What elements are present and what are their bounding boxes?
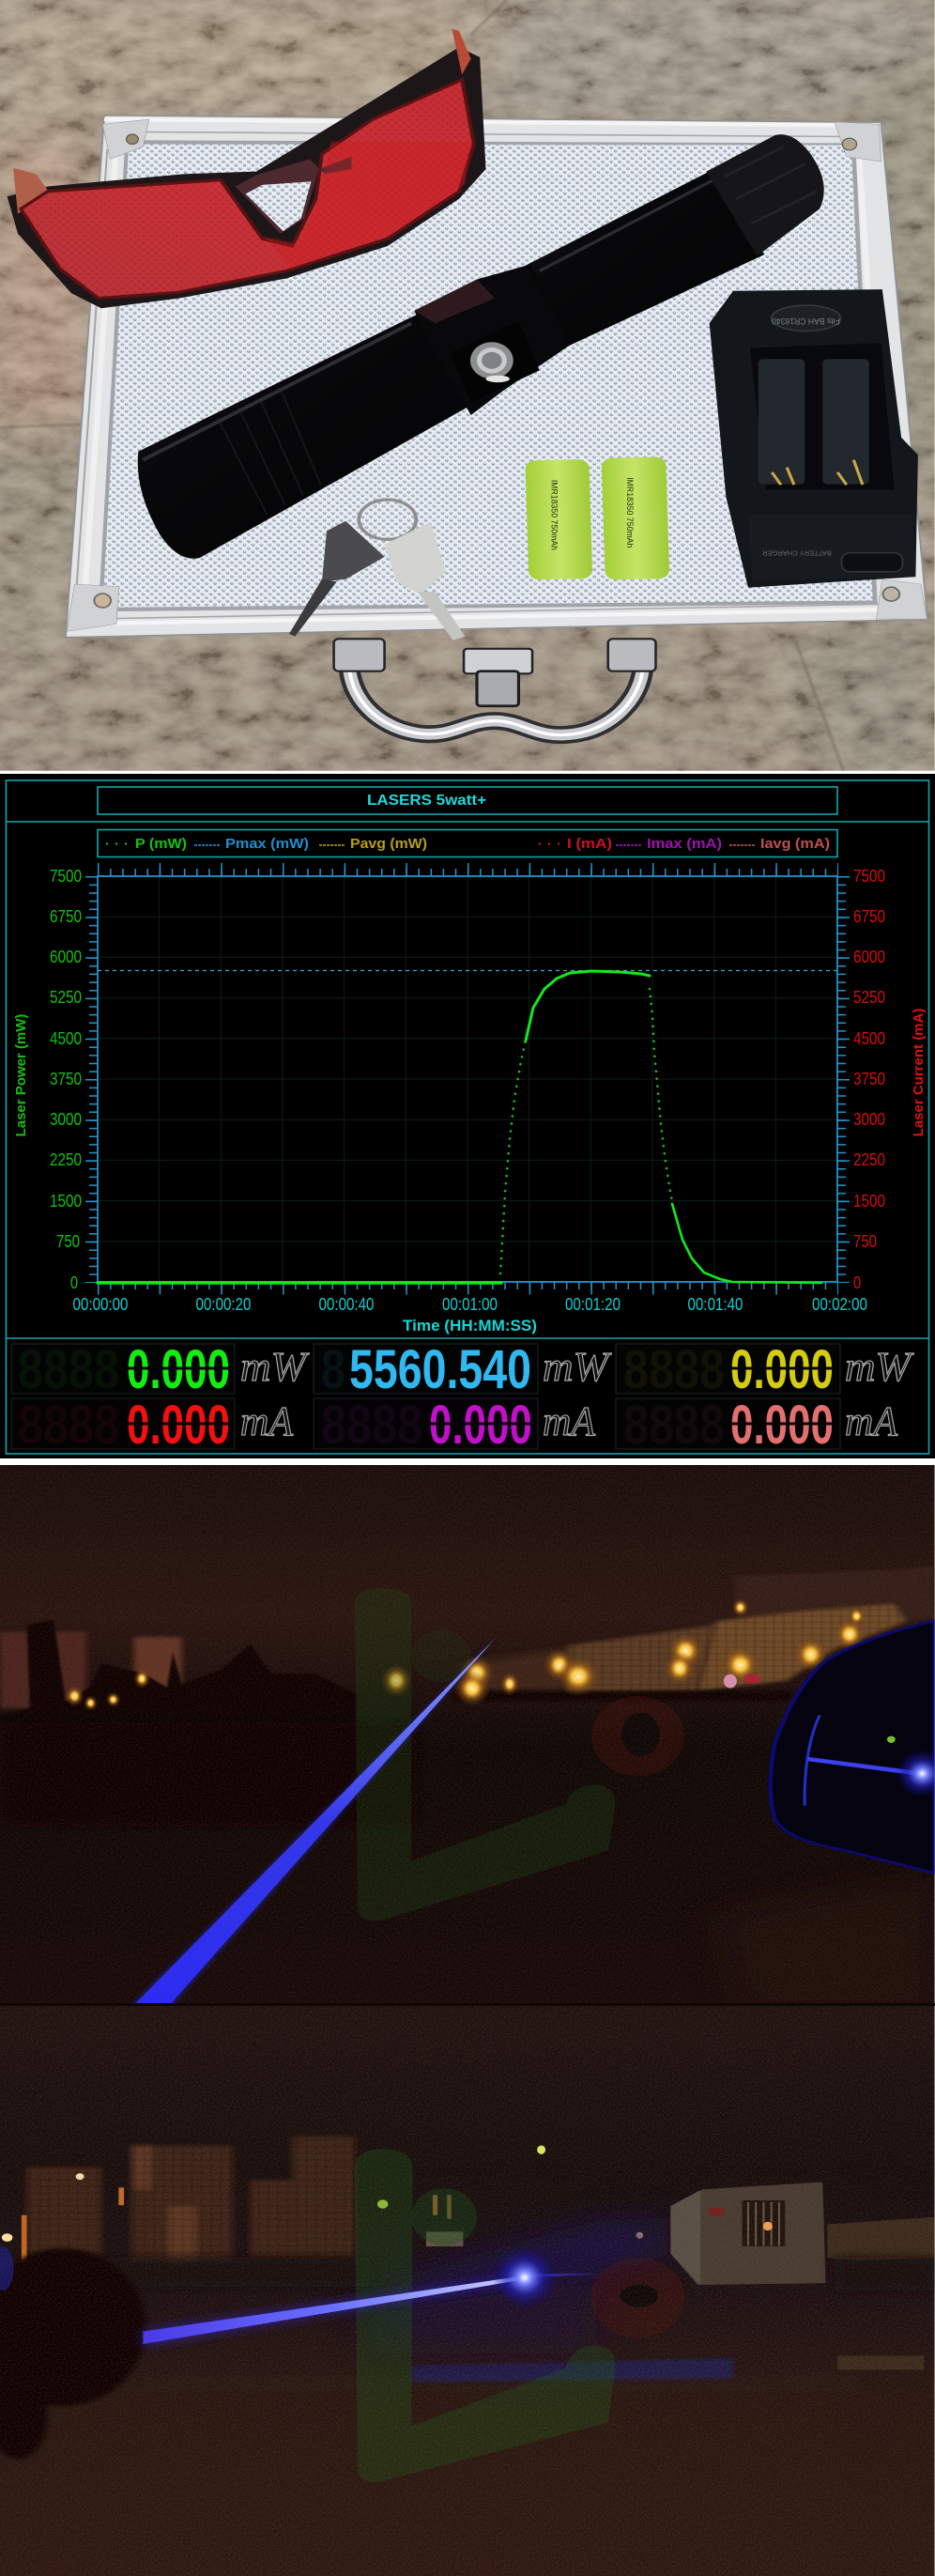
right axis labels: 6750 [853, 907, 885, 926]
right axis labels: 3750 [853, 1070, 885, 1088]
battery left: IMR18350 750mAh [549, 480, 559, 550]
watermark letter L [355, 2149, 615, 2482]
curb with blue reflection [143, 2355, 924, 2391]
y axis title left: Laser Power (mW) [13, 1014, 29, 1136]
dimpled metal plate [102, 145, 873, 608]
line chart: laser power over time [13, 867, 927, 1334]
left axis labels: 6750 [50, 907, 82, 926]
readout: power average [616, 1339, 913, 1400]
left axis labels: 3750 [50, 1070, 82, 1088]
charger caption: BATTERY CHARGER [761, 549, 832, 558]
outer frame [6, 780, 929, 1454]
low building right [827, 2217, 935, 2261]
watermark bump [411, 2188, 477, 2245]
nose bridge opening [236, 157, 352, 234]
readout: current now: mA [240, 1398, 294, 1444]
readout: current max: 0.000 [429, 1395, 532, 1456]
power curve [98, 971, 821, 1283]
time axis labels: 00:02:00 [812, 1295, 867, 1314]
right axis labels: 3000 [853, 1110, 885, 1129]
right axis labels: 7500 [853, 867, 885, 886]
x axis title: Time (HH:MM:SS) [403, 1317, 537, 1334]
goggle back frame [8, 47, 486, 308]
time axis labels: 00:00:20 [195, 1295, 252, 1314]
left axis labels: 750 [56, 1232, 80, 1251]
right axis labels: 6000 [853, 948, 885, 966]
readout: power average: 8888 [623, 1339, 725, 1400]
right city buildings [453, 1566, 935, 1702]
continuous laser core [411, 172, 764, 412]
left axis labels: 7500 [50, 867, 82, 886]
right axis labels: 1500 [853, 1192, 885, 1211]
dark foreground figure [0, 2248, 146, 2460]
digital readouts [11, 1339, 913, 1456]
panel: night photo with laser beam and spot [0, 2000, 935, 2576]
keys [289, 500, 465, 640]
readout: power now: 8888 [18, 1339, 119, 1400]
battery slots [759, 359, 805, 485]
switch collar [414, 266, 525, 415]
battery left [525, 459, 592, 579]
readout: power average: 0.000 [730, 1339, 834, 1400]
chart title [98, 787, 837, 814]
left axis labels: 2250 [50, 1150, 82, 1169]
car mirror [771, 1621, 935, 1874]
charger label plate [772, 305, 840, 332]
time axis labels: 00:01:20 [565, 1295, 621, 1314]
blue glow on ground [358, 2217, 667, 2316]
red safety goggles [8, 29, 486, 308]
readout: current max: mA [543, 1398, 596, 1444]
street lamps [65, 1598, 865, 1711]
right axis labels: 0 [853, 1273, 861, 1292]
chart legend: P (mW) [135, 836, 187, 852]
chart legend [98, 830, 837, 856]
time axis labels [73, 1295, 867, 1314]
band between photos [0, 2003, 935, 2006]
handle and latch [334, 639, 655, 735]
film grain [0, 1465, 935, 2007]
tube [569, 173, 764, 346]
left axis labels: 0 [70, 1273, 78, 1292]
readout: current average: mA [845, 1398, 898, 1444]
left axis labels: 5250 [50, 988, 82, 1007]
chart grid [98, 876, 837, 1282]
watermark letter L [355, 1588, 615, 1920]
aluminium case [66, 116, 927, 638]
panel: night photo with laser beam and car mirror [0, 1461, 935, 2010]
left axis labels: 4500 [50, 1029, 82, 1048]
tower window texture [27, 2136, 355, 2263]
laser beam [131, 1639, 495, 2005]
y axis title right: Laser Current (mA) [911, 1009, 927, 1136]
readout: power now: mW [240, 1344, 309, 1390]
laser pointer body [138, 134, 824, 559]
battery right: IMR18350 750mAh [625, 477, 635, 548]
axes and ticks [92, 870, 843, 1288]
laser spot [492, 2246, 558, 2308]
stone ground background [0, 0, 935, 779]
readout: power now [11, 1339, 309, 1400]
left axis labels: 6000 [50, 948, 82, 966]
time axis labels: 00:01:00 [442, 1295, 498, 1314]
readout: current max: 8888 [321, 1395, 422, 1456]
left axis labels: 1500 [50, 1192, 82, 1211]
readout: power average: mW [845, 1344, 913, 1390]
watermark bump [411, 1630, 471, 1682]
green signal lights [377, 2145, 545, 2209]
right axis labels: 2250 [853, 1150, 885, 1169]
lithium batteries [525, 456, 669, 579]
readout: power max: 8 [321, 1339, 345, 1400]
left axis labels: 3000 [50, 1110, 82, 1129]
readout: power max: 5560.540 [349, 1339, 531, 1400]
chart legend: Imax (mA) [647, 836, 722, 852]
readout: current average [616, 1395, 898, 1456]
watermark red ring [591, 2258, 684, 2338]
right axis labels [853, 867, 885, 1292]
switch button [470, 342, 513, 382]
charger [710, 289, 918, 588]
readout: power max: mW [543, 1344, 611, 1390]
laser head section [138, 317, 471, 559]
readout: current now: 0.000 [127, 1395, 230, 1456]
panel: product photo of laser kit on aluminium case [0, 0, 935, 779]
knurled end cap [706, 134, 824, 256]
chart legend: Pmax (mW) [225, 836, 309, 852]
time axis labels: 00:00:40 [319, 1295, 374, 1314]
readout: current now: 8888 [18, 1395, 119, 1456]
film grain [0, 2006, 935, 2576]
lower right road tint [715, 1875, 935, 2010]
left axis labels [50, 867, 82, 1292]
panel: laser power meter screen [0, 774, 935, 1458]
portable cabin [670, 2183, 825, 2285]
apartment towers [27, 2136, 355, 2266]
goggle lens [21, 80, 474, 299]
battery right [602, 456, 669, 579]
mirror reflected beam [807, 1750, 935, 1797]
corner rivets [67, 119, 927, 631]
left buildings and trees [0, 1620, 417, 1827]
readout: current average: 8888 [623, 1395, 725, 1456]
watermark red ring [591, 1696, 684, 1776]
laser beam [143, 2246, 599, 2347]
right axis labels: 750 [853, 1232, 877, 1251]
time axis labels: 00:00:00 [73, 1295, 128, 1314]
readout: current now [11, 1395, 294, 1456]
chart legend: I (mA) [567, 836, 612, 852]
readout: current max [314, 1395, 596, 1456]
chart title: LASERS 5watt+ [367, 793, 486, 809]
chart legend: Pavg (mW) [350, 836, 427, 852]
Pmax dashed line [98, 969, 837, 971]
readout: power now: 0.000 [127, 1339, 230, 1400]
right axis labels: 5250 [853, 988, 885, 1007]
right axis labels: 4500 [853, 1029, 885, 1048]
readout: current average: 0.000 [730, 1395, 834, 1456]
chart legend: Iavg (mA) [760, 836, 830, 852]
tower lights [2, 2173, 643, 2265]
charger label plate: Fits BAH CR18340 [772, 316, 840, 326]
time axis labels: 00:01:40 [687, 1295, 743, 1314]
